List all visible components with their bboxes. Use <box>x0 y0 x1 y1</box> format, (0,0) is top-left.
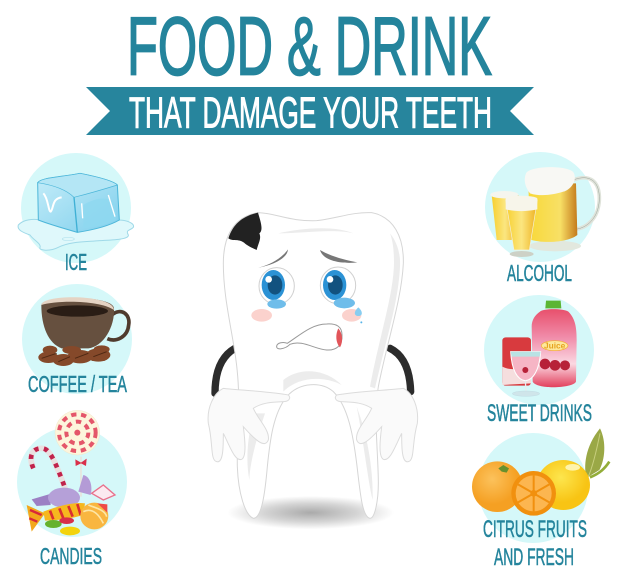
icon: juice bottle, can and glass: Juice <box>544 342 566 351</box>
icon: coffee cup <box>38 297 129 366</box>
tooth body <box>223 213 403 518</box>
panel: candies <box>17 410 127 569</box>
icon: citrus fruits <box>472 428 609 516</box>
cheek: right <box>342 309 361 322</box>
panel: citrus fruits <box>472 428 609 571</box>
arm: left <box>215 348 235 393</box>
tear <box>355 307 362 316</box>
eye: right <box>320 267 356 308</box>
panel: alcohol <box>485 152 599 286</box>
cavity <box>228 213 262 250</box>
icon: ice cube <box>18 173 134 250</box>
label: CANDIES <box>40 543 102 569</box>
label: COFFEE / TEA <box>28 371 127 397</box>
panel: coffee / tea <box>22 284 132 397</box>
label: ALCOHOL <box>507 260 572 286</box>
eyebrows <box>258 249 288 268</box>
tooth character <box>208 213 418 529</box>
hand: right <box>335 388 418 462</box>
tooth shading <box>247 228 400 500</box>
label <box>483 516 587 571</box>
ground shadow <box>227 496 394 529</box>
hand: left <box>208 388 290 462</box>
eye: left <box>259 268 294 309</box>
label: ICE <box>65 249 87 275</box>
arm: right <box>390 348 411 392</box>
icon: candies <box>27 410 115 535</box>
icon: beer glasses <box>490 167 599 257</box>
cheek: left <box>251 309 272 322</box>
panel: ice <box>18 153 134 275</box>
panel: sweet drinks <box>484 295 594 427</box>
mouth <box>277 324 342 350</box>
icon: coffee beans <box>38 345 110 366</box>
